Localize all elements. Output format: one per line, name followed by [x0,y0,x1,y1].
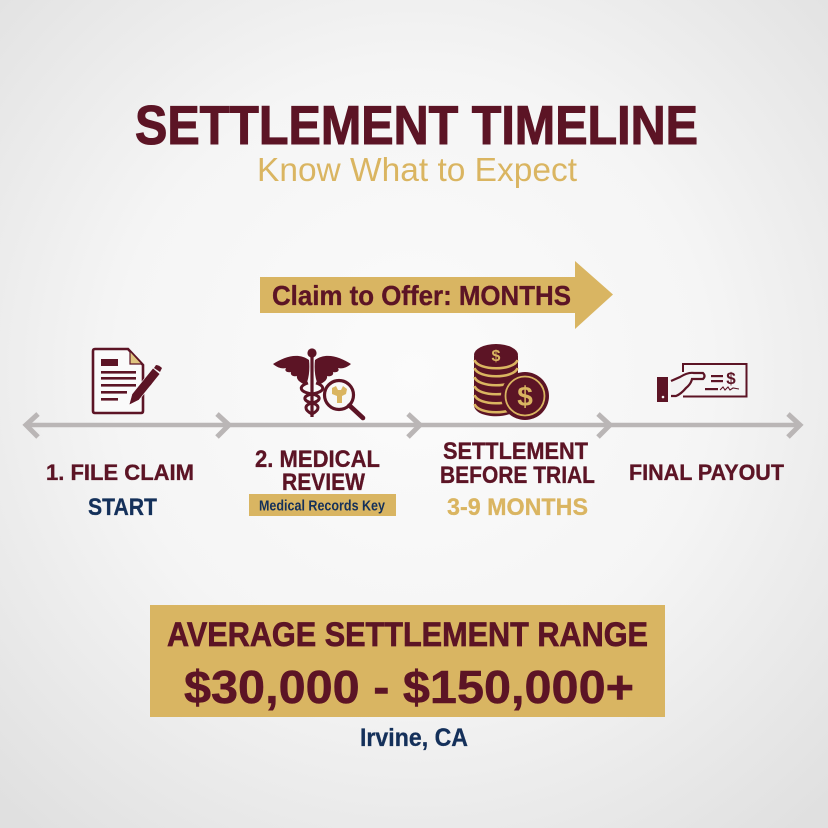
panel: average settlement range: AVERAGE SETTLEMENT RANGE [167,616,648,654]
subtitle: Know What to Expect [257,151,577,188]
step 1 label: START [88,494,157,521]
icon: hand with check [657,364,746,402]
step 3 label: SETTLEMENT [443,438,588,465]
step 2 label: Medical Records Key [259,498,385,514]
icon: hand with check: $ [726,369,736,388]
arrow banner: claim to offer: Claim to Offer: MONTHS [272,280,571,311]
step 3 label: BEFORE TRIAL [440,462,595,489]
location label: Irvine, CA [360,724,468,752]
step 3 label: 3-9 MONTHS [447,494,588,521]
step 4 label: FINAL PAYOUT [629,460,785,485]
icon: caduceus with magnifier [273,348,363,418]
title: SETTLEMENT TIMELINE [135,94,698,156]
step 1 label: 1. FILE CLAIM [46,460,194,485]
timeline arrow line [26,414,800,437]
step 2 label: 2. MEDICAL [255,446,380,473]
arrow banner: claim to offer [260,261,613,329]
step 2 label [249,446,396,516]
panel: average settlement range [150,605,665,717]
icon: document with pen [93,349,162,413]
step 1 label [46,460,194,521]
step 2 label: REVIEW [282,469,365,496]
icon: coin stack [474,344,549,420]
panel: average settlement range: $30,000 - $150,000+ [184,661,634,713]
icon: coin stack: $ [517,381,533,412]
step 3 label [440,438,595,521]
icon: coin stack: $ [492,348,501,365]
